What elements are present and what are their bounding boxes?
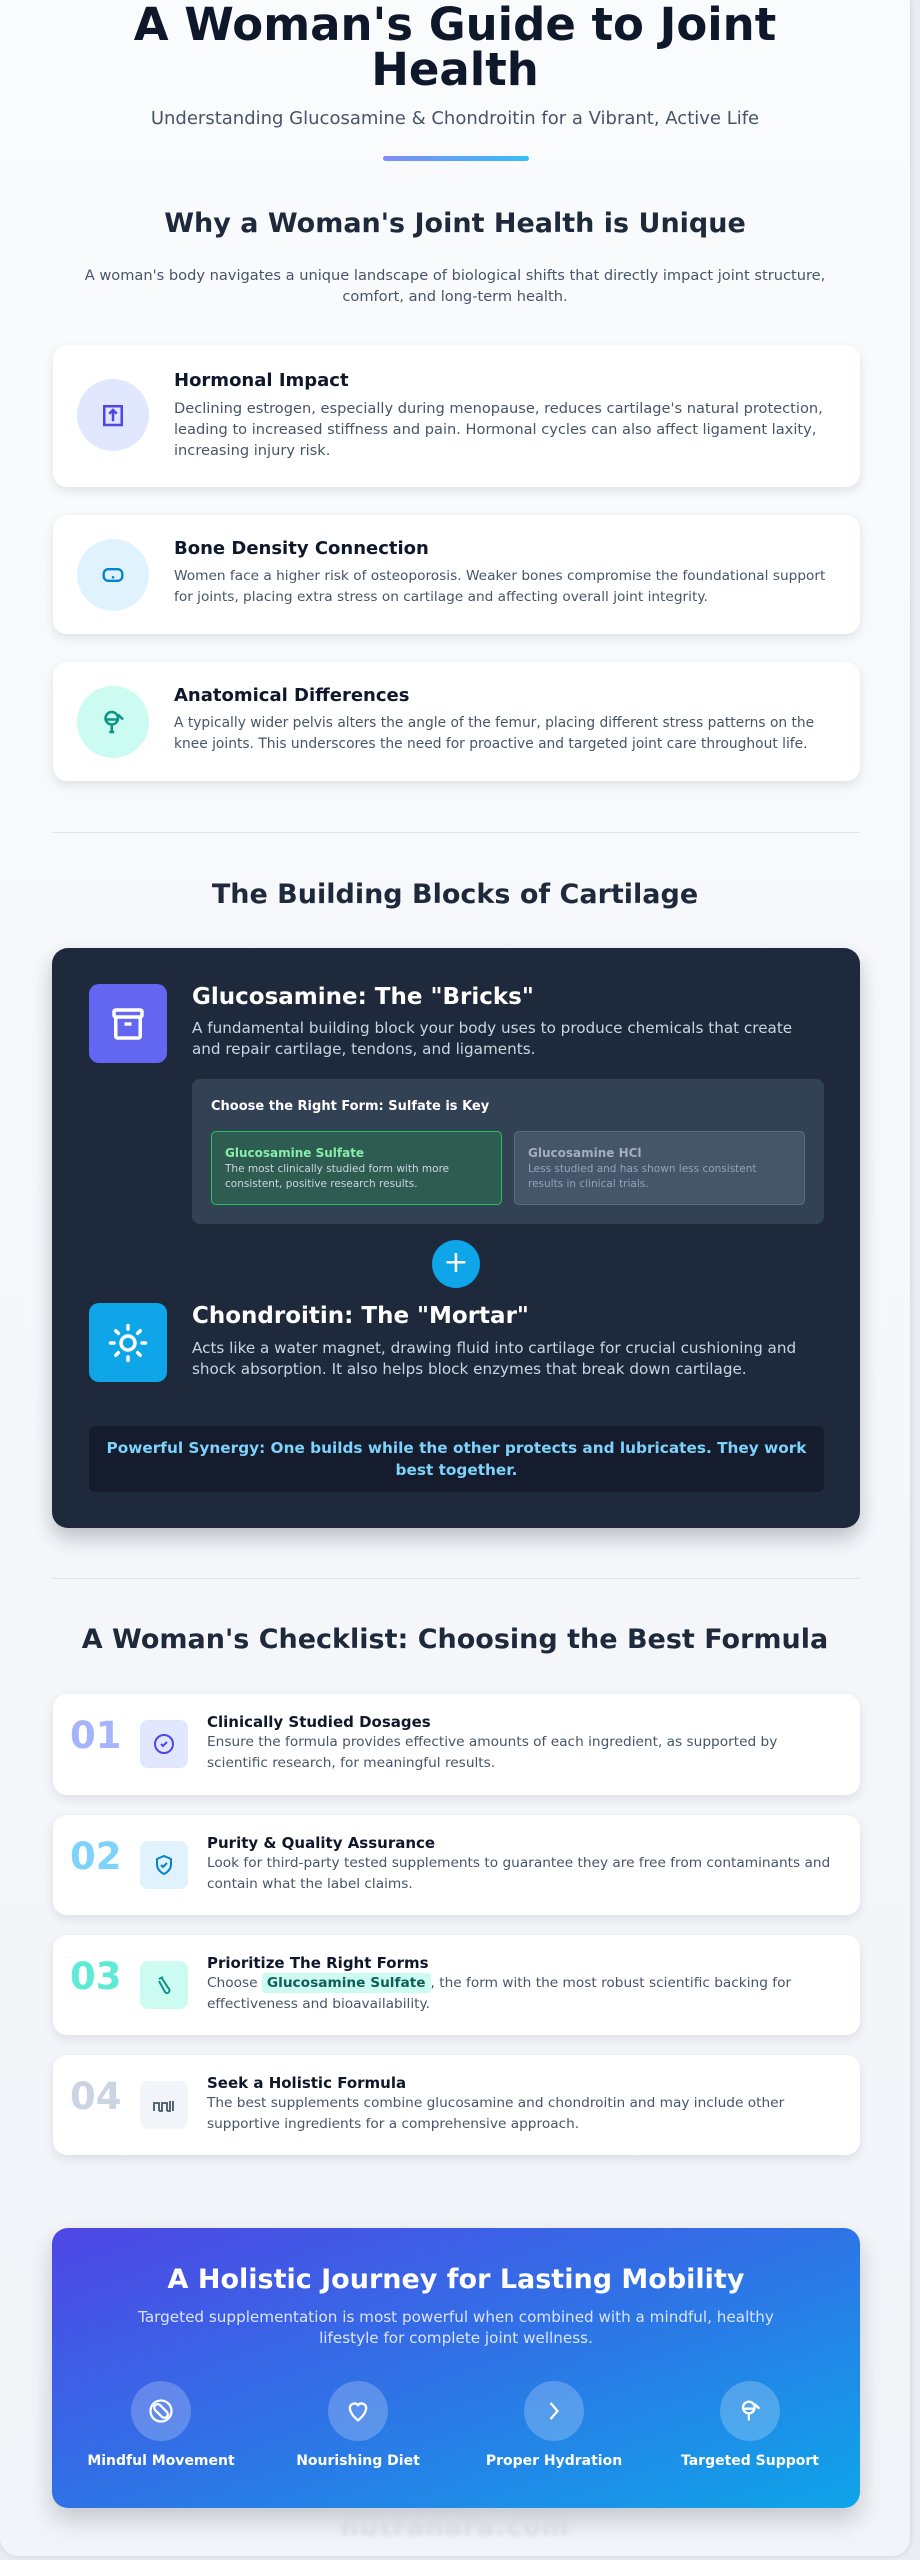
icon: anatomy <box>77 686 149 758</box>
text: Targeted supplementation is most powerful when combined with a mindful, healthy <box>138 2308 774 2326</box>
text: chondroitin: shock absorption. It also helps block enzymes that break down cartilage. <box>192 1360 747 1378</box>
checklist item 04: The best supplements combine glucosamine and chondroitin and may include other <box>207 2095 784 2111</box>
text: glucosamine: A fundamental building block your body uses to produce chemicals that create <box>192 1019 792 1037</box>
checklist item 04 <box>53 2055 860 2155</box>
checklist item 03: Prioritize The Right Forms <box>207 1954 429 1972</box>
heading: building blocks: The Building Blocks of Cartilage <box>212 879 698 910</box>
heading: why unique: Why a Woman's Joint Health is Unique <box>164 208 746 239</box>
box heading: Choose the Right Form: Sulfate is Key <box>211 1099 489 1114</box>
icon: chondroitin <box>89 1303 167 1382</box>
option: sulfate: consistent, positive research results. <box>225 1178 418 1190</box>
heading: Anatomical Differences <box>174 685 409 706</box>
title <box>134 0 776 96</box>
icon: plus <box>432 1240 480 1288</box>
heading: Hormonal Impact <box>174 370 349 391</box>
option: HCl: Less studied and has shown less consistent <box>528 1163 757 1175</box>
icon: test tube <box>140 1961 188 2009</box>
intro text: comfort, and long-term health. <box>342 288 568 305</box>
panel: building blocks dark <box>52 948 860 1528</box>
text: lifestyle for complete joint wellness. <box>319 2329 593 2347</box>
item: proper hydration <box>486 2381 622 2469</box>
text <box>174 568 826 605</box>
card: hormonal impact <box>53 345 860 487</box>
checklist item 02: 02 <box>70 1835 122 1878</box>
checklist item 03: effectiveness and bioavailability. <box>207 1996 430 2012</box>
checklist item 01: Ensure the formula provides effective amounts of each ingredient, as supported by <box>207 1734 777 1750</box>
callout: synergy: Powerful Synergy: One builds while the other protects and lubricates. They work <box>107 1439 806 1457</box>
text: glucosamine: and repair cartilage, tendons, and ligaments. <box>192 1040 535 1058</box>
icon: bone <box>77 539 149 611</box>
subtitle: Understanding Glucosamine & Chondroitin for a Vibrant, Active Life <box>151 108 759 129</box>
text: chondroitin <box>192 1339 796 1378</box>
heading: checklist: A Woman's Checklist: Choosing the Best Formula <box>82 1624 828 1655</box>
checklist item 04: 04 <box>70 2075 122 2118</box>
accent bar <box>383 156 529 161</box>
checklist item 01 <box>53 1694 860 1795</box>
text: leading to increased stiffness and pain. Hormonal cycles can also affect ligament laxity, <box>174 421 816 438</box>
icon: plus: + <box>443 1245 469 1280</box>
callout: synergy <box>89 1426 824 1492</box>
heading: chondroitin: Chondroitin: The "Mortar" <box>192 1303 529 1329</box>
text <box>174 715 814 752</box>
icon: bars <box>140 2081 188 2129</box>
card: anatomical <box>53 662 860 781</box>
option: sulfate: The most clinically studied form with more <box>225 1163 449 1175</box>
text: knee joints. This underscores the need for proactive and targeted joint care throughout life. <box>174 736 808 752</box>
checklist item 02 <box>53 1815 860 1915</box>
panel: holistic journey <box>52 2228 860 2508</box>
item: nourishing diet <box>296 2381 420 2469</box>
heading: Bone Density Connection <box>174 538 429 559</box>
item: targeted support <box>681 2381 819 2469</box>
card: bone density <box>53 515 860 634</box>
option: HCl: results in clinical trials. <box>528 1178 649 1190</box>
text <box>138 2308 774 2347</box>
option: HCl: Glucosamine HCl <box>528 1146 642 1160</box>
text: increasing injury risk. <box>174 442 330 459</box>
checklist item 01: Clinically Studied Dosages <box>207 1713 431 1731</box>
watermark: nutrahara.com <box>340 2512 570 2542</box>
item: mindful movement: Mindful Movement <box>87 2453 235 2469</box>
checklist item 01: 01 <box>70 1714 122 1757</box>
checklist item 02: Look for third-party tested supplements to guarantee they are free from contaminants and <box>207 1855 830 1871</box>
title: Health <box>371 43 539 96</box>
item: proper hydration: Proper Hydration <box>486 2453 622 2469</box>
icon: hormonal <box>77 379 149 451</box>
text <box>174 400 823 459</box>
text: A typically wider pelvis alters the angle of the femur, placing different stress patterns on the <box>174 715 814 731</box>
text: glucosamine <box>192 1019 792 1058</box>
item: nourishing diet: Nourishing Diet <box>296 2453 420 2469</box>
checklist item 04: supportive ingredients for a comprehensive approach. <box>207 2116 579 2132</box>
item: mindful movement <box>87 2381 235 2469</box>
checklist item 04: Seek a Holistic Formula <box>207 2074 406 2092</box>
option: sulfate <box>211 1131 502 1205</box>
heading: glucosamine: Glucosamine: The "Bricks" <box>192 984 534 1010</box>
checklist item 03: Choose Glucosamine Sulfate , the form with the most robust scientific backing for <box>207 1975 791 1991</box>
callout: synergy: best together. <box>396 1461 517 1479</box>
text: for joints, placing extra stress on cartilage and affecting overall joint integrity. <box>174 589 708 605</box>
checklist item 02: Purity & Quality Assurance <box>207 1834 435 1852</box>
item: targeted support: Targeted Support <box>681 2453 819 2469</box>
icon: check <box>140 1720 188 1768</box>
checklist item 03: 03 <box>70 1955 122 1998</box>
icon: shield <box>140 1841 188 1889</box>
text: Declining estrogen, especially during menopause, reduces cartilage's natural protection, <box>174 400 823 417</box>
intro text <box>84 267 825 305</box>
intro text: A woman's body navigates a unique landscape of biological shifts that directly impact joint structure, <box>85 267 825 284</box>
checklist item 03 <box>53 1935 860 2035</box>
text: Women face a higher risk of osteoporosis. Weaker bones compromise the foundational support <box>174 568 825 584</box>
heading: A Holistic Journey for Lasting Mobility <box>168 2264 744 2295</box>
option: sulfate: Glucosamine Sulfate <box>225 1146 364 1160</box>
checklist item 01: scientific research, for meaningful results. <box>207 1755 495 1771</box>
icon: glucosamine <box>89 984 167 1063</box>
text: chondroitin: Acts like a water magnet, drawing fluid into cartilage for crucial cushioning and <box>192 1339 796 1357</box>
checklist item 02: contain what the label claims. <box>207 1876 413 1892</box>
box: choose form <box>192 1079 824 1224</box>
option: HCl <box>514 1131 805 1205</box>
